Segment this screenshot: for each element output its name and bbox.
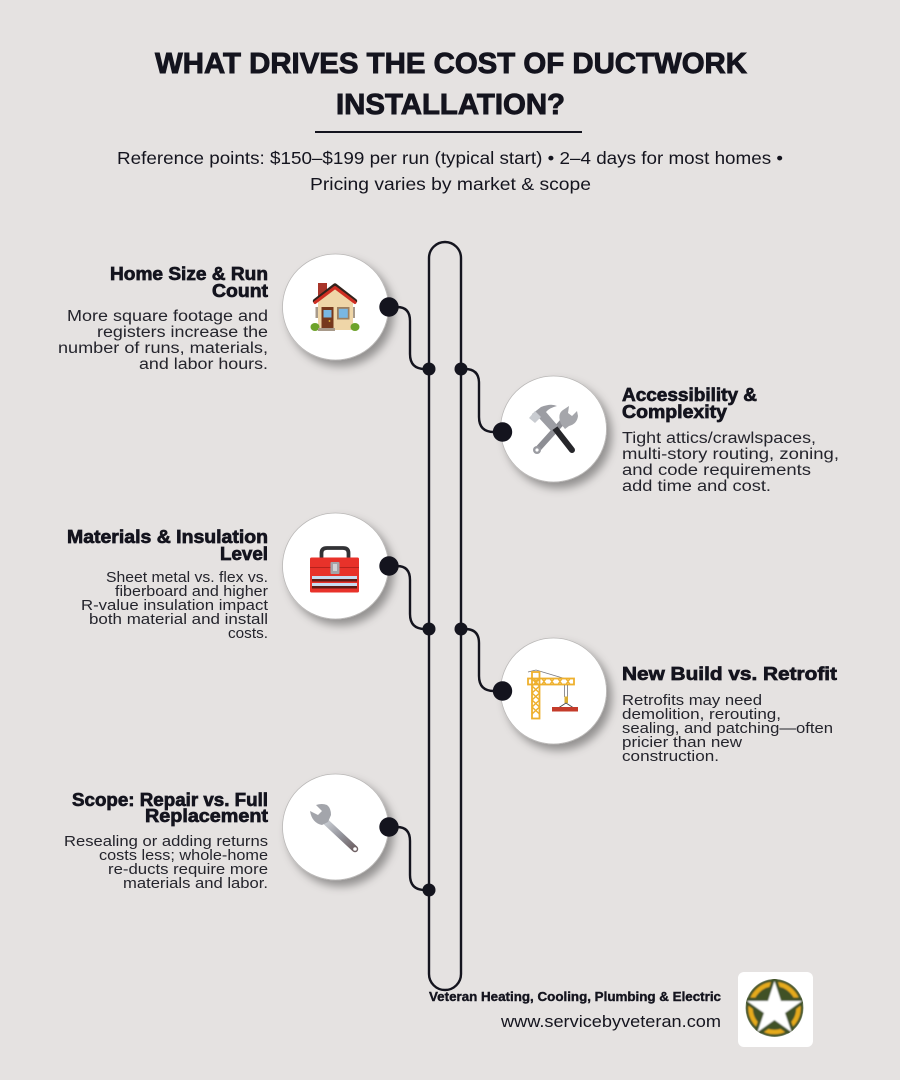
icon circle: house <box>282 254 388 360</box>
text: scope: re-ducts require more <box>108 862 268 878</box>
text: scope: Resealing or adding returns <box>64 834 268 850</box>
icon circle: hammer and wrench <box>500 376 606 482</box>
title <box>155 48 747 121</box>
subtitle: Reference points: $150–$199 per run (typical start) • 2–4 days for most homes • <box>117 148 783 168</box>
text: new build: Retrofits may need <box>622 693 762 709</box>
icon circle: crane <box>500 638 606 744</box>
text: accessibility: Tight attics/crawlspaces, <box>622 430 816 447</box>
text: scope: Replacement <box>145 806 268 826</box>
node dot <box>379 556 399 576</box>
subtitle <box>117 148 783 194</box>
footer company name: Veteran Heating, Cooling, Plumbing & Electric <box>429 989 721 1004</box>
text: scope: materials and labor. <box>123 876 268 892</box>
central timeline track <box>429 242 461 990</box>
text: new build: sealing, and patching—often <box>622 721 833 737</box>
text: scope <box>64 790 268 892</box>
subtitle: Pricing varies by market & scope <box>310 174 591 194</box>
logo <box>738 972 813 1047</box>
text: accessibility: multi-story routing, zoning, <box>622 446 839 463</box>
text: home size: number of runs, materials, <box>58 340 268 357</box>
text: materials: Level <box>220 544 268 564</box>
text: materials <box>67 527 268 642</box>
title underline <box>315 131 582 133</box>
connectors and junction dots <box>389 307 503 896</box>
text: materials: fiberboard and higher <box>115 584 268 600</box>
text: accessibility: Complexity <box>622 402 727 422</box>
text: scope: costs less; whole-home <box>99 848 268 864</box>
text: accessibility: add time and cost. <box>622 478 771 495</box>
item: materials and insulation level <box>67 513 399 642</box>
item: scope repair vs full replacement <box>64 774 399 892</box>
text: home size: registers increase the <box>97 324 268 341</box>
node dot <box>379 817 399 837</box>
icon circle: wrench <box>282 774 388 880</box>
title: WHAT DRIVES THE COST OF DUCTWORK <box>155 48 747 80</box>
text: materials: costs. <box>228 626 268 642</box>
node dot <box>379 297 399 317</box>
icon circle: toolbox <box>282 513 388 619</box>
text: accessibility <box>622 385 839 495</box>
text: home size <box>58 264 268 373</box>
node dot <box>493 422 512 442</box>
text: home size: More square footage and <box>67 308 268 325</box>
text: accessibility: Accessibility & <box>622 385 757 405</box>
node dot <box>493 681 512 701</box>
text: new build: New Build vs. Retrofit <box>622 664 837 684</box>
text: materials: both material and install <box>89 612 268 628</box>
text: new build <box>622 664 837 765</box>
text: accessibility: and code requirements <box>622 462 811 479</box>
text: home size: Count <box>212 281 268 301</box>
item: accessibility and complexity <box>493 376 839 495</box>
text: scope: Scope: Repair vs. Full <box>72 790 268 810</box>
text: materials: R-value insulation impact <box>81 598 268 614</box>
text: new build: construction. <box>622 749 719 765</box>
item: new build vs retrofit <box>493 638 837 765</box>
footer website: www.servicebyveteran.com <box>500 1013 721 1031</box>
text: home size: Home Size & Run <box>110 264 268 284</box>
item: home size and run count <box>58 254 399 373</box>
text: materials: Materials & Insulation <box>67 527 268 547</box>
text: new build: pricier than new <box>622 735 743 751</box>
text: new build: demolition, rerouting, <box>622 707 781 723</box>
title: INSTALLATION? <box>336 89 565 121</box>
text: home size: and labor hours. <box>139 356 268 373</box>
text: materials: Sheet metal vs. flex vs. <box>106 570 268 586</box>
